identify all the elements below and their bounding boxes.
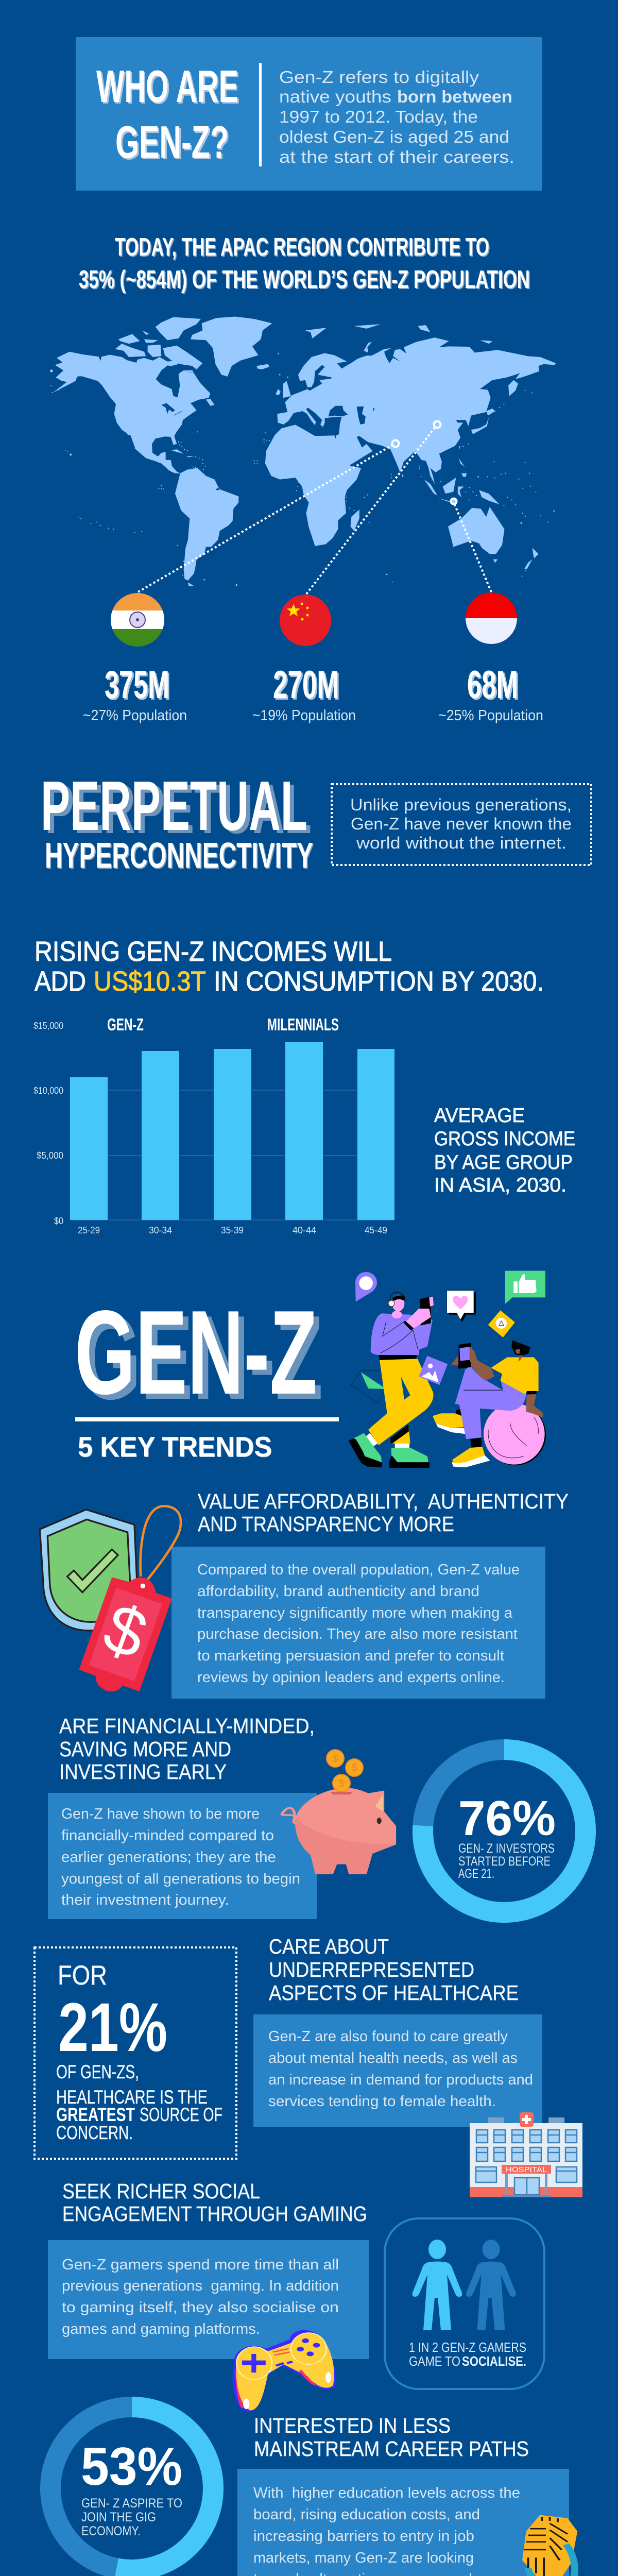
icon: india flag [111,593,164,647]
stat: china 270m: ~19% Population [252,707,356,724]
icon: shield and price tag [40,1506,181,1691]
panel: who are gen-z [76,37,542,191]
bar chart: gross income by age group [33,1015,394,1235]
donut chart: 76%: 76% [458,1791,556,1846]
icon: person dark [466,2240,516,2330]
text: gen-z definition: oldest Gen-Z is aged 25 and [279,127,509,146]
heading: gen-z 5 key trends: 5 KEY TRENDS [78,1431,272,1463]
icon: china flag [280,595,331,646]
heading: rising gen-z incomes: ADD [35,966,86,997]
text: gen-z definition: Gen-Z refers to digitally [279,67,479,87]
heading: who are gen-z [96,61,238,167]
callout: 21% healthcare: CONCERN. [56,2122,133,2143]
stat: indonesia 68m [438,663,543,724]
icon: coins: $ [338,1778,345,1789]
text: gen-z definition [279,67,514,166]
text: healthcare body: Gen-Z are also found to care greatly [268,2028,508,2045]
text: career body: board, rising education costs, and [253,2506,480,2523]
text: gaming body: to gaming itself, they also socialise on [62,2299,339,2316]
heading: rising gen-z incomes: RISING GEN-Z INCOMES WILL [35,936,392,967]
text: gaming body: Gen-Z gamers spend more time than all [62,2257,339,2273]
bar chart: gross income by age group: $0 [54,1216,63,1226]
heading: value affordability: VALUE AFFORDABILITY, AUTHENTICITY [198,1489,569,1513]
heading: gaming: ENGAGEMENT THROUGH GAMING [62,2202,367,2226]
callout: dotted box internet: world without the internet. [356,834,566,852]
heading: rising gen-z incomes: US$10.3T [94,966,206,997]
callout: 21% healthcare: FOR [58,1960,107,1991]
callout: dotted box internet: Gen-Z have never known the [351,815,572,833]
bar chart: gross income by age group: $10,000 [33,1086,63,1096]
heading: financially-minded [59,1714,315,1784]
text: chart caption [434,1105,575,1196]
trend 1: value affordability [40,1489,569,1699]
donut chart: 76%: AGE 21. [458,1867,494,1881]
text: chart caption: IN ASIA, 2030. [434,1174,566,1196]
text: value body: Compared to the overall population, Gen-Z value [197,1562,520,1578]
heading: rising gen-z incomes: IN CONSUMPTION BY 2030. [214,966,544,997]
icon: coins [327,1750,363,1792]
text: healthcare body: an increase in demand for products and [268,2072,533,2088]
heading: perpetual hyperconnectivity: HYPERCONNECTIVITY [45,835,313,875]
heading: gaming: SEEK RICHER SOCIAL [62,2179,260,2203]
icon: hospital [470,2112,582,2197]
heading: career paths: INTERESTED IN LESS [254,2414,451,2437]
bar chart: gross income by age group: 30-34 [149,1225,172,1235]
callout: 21% healthcare: SOURCE OF [140,2104,222,2125]
trend 2: financially-minded [48,1714,586,1919]
icon: indonesia flag [466,592,517,644]
text: career body [253,2485,520,2576]
heading: career paths: MAINSTREAM CAREER PATHS [254,2437,529,2461]
text: financial body: earlier generations; they are the [61,1849,276,1866]
text: gaming body: games and gaming platforms. [62,2321,260,2337]
heading: who are gen-z: GEN-Z? [115,116,229,167]
icon: game controller [233,2330,336,2412]
illustration: gen-z people with phones [349,1271,546,1468]
icon: hospital: HOSPITAL [506,2165,547,2174]
bar chart: gross income by age group: $15,000 [33,1021,63,1031]
text: chart caption: GROSS INCOME [434,1128,575,1150]
text: financial body: youngest of all generations to begin [61,1871,300,1887]
callout: 21% healthcare: 21% [58,1989,167,2066]
stat: india 375m: 375M [105,663,169,707]
callout: 1 in 2 gamers: GAME TO [409,2353,460,2369]
stat: indonesia 68m: ~25% Population [438,707,543,724]
stat: indonesia 68m: 68M [467,663,518,707]
connector lines: flags to map markers [138,421,491,594]
heading: financially-minded: SAVING MORE AND [59,1737,231,1761]
callout: 1 in 2 gamers [385,2218,544,2389]
heading: rising gen-z incomes [35,936,544,997]
text: career body: increasing barriers to entry in job [253,2528,474,2545]
heading: apac population [79,233,530,294]
callout: 21% healthcare: OF GEN-ZS, [56,2061,139,2082]
bar chart: gross income by age group: 45-49 [365,1225,387,1235]
text: gen-z definition: at the start of their careers. [279,147,514,166]
trend 5: career paths [237,2414,580,2576]
text: gen-z definition: born between [397,87,512,106]
heading: gen-z 5 key trends: GEN-Z [75,1286,317,1419]
icon: coins: $ [351,1762,357,1774]
text: chart caption: BY AGE GROUP [434,1151,573,1174]
stat: china 270m: 270M [273,663,339,707]
donut chart: 76% [423,1750,586,1912]
trend 4: gaming [48,2179,544,2412]
text: gaming body [62,2257,339,2337]
text: gaming body: previous generations gaming. In addition [62,2278,339,2294]
heading: financially-minded: INVESTING EARLY [59,1760,227,1784]
text: financial body: financially-minded compared to [61,1827,274,1844]
icon: person light [413,2240,462,2330]
heading: perpetual hyperconnectivity: PERPETUAL [41,767,307,845]
bar chart: gross income by age group: MILENNIALS [267,1015,339,1034]
heading: healthcare: CARE ABOUT [269,1935,389,1958]
text: financial body: their investment journey. [61,1892,229,1908]
callout: dotted box internet [332,784,591,865]
donut chart: 53%: ECONOMY. [81,2524,141,2538]
text: gen-z definition: 1997 to 2012. Today, the [279,107,478,126]
bar chart: gross income by age group: GEN-Z [107,1015,144,1034]
text: value body [197,1562,520,1686]
text: value body: affordability, brand authenticity and brand [197,1583,479,1600]
heading: gen-z 5 key trends [75,1286,339,1463]
text: value body: transparency significantly more when making a [197,1605,513,1621]
heading: career paths [254,2414,529,2461]
callout: 21% healthcare: HEALTHCARE IS THE [56,2087,208,2108]
text: chart caption: AVERAGE [434,1105,525,1127]
heading: healthcare: UNDERREPRESENTED [269,1958,474,1981]
stat: china 270m [252,663,356,724]
callout: 21% healthcare [35,1947,236,2159]
world map [50,316,556,586]
text: financial body [61,1806,300,1908]
stat: india 375m [83,663,187,724]
donut chart: 53%: GEN- Z ASPIRE TO [81,2496,182,2511]
icon: shield and price tag: $ [94,1588,157,1674]
heading: who are gen-z: WHO ARE [96,61,238,112]
text: healthcare body [268,2028,533,2110]
text: financial body: Gen-Z have shown to be more [61,1806,260,1822]
heading: perpetual hyperconnectivity [41,767,313,875]
text: healthcare body: services tending to female health. [268,2093,496,2110]
donut chart: 76%: STARTED BEFORE [458,1854,551,1869]
icon: coins: $ [332,1753,338,1765]
text: value body: to marketing persuasion and prefer to consult [197,1648,504,1664]
icon: piggy bank [282,1750,396,1874]
heading: healthcare: ASPECTS OF HEALTHCARE [269,1981,519,2005]
heading: financially-minded: ARE FINANCIALLY-MINDED, [59,1714,315,1738]
text: gen-z definition: native youths [279,87,391,106]
text: value body: purchase decision. They are also more resistant [197,1626,518,1642]
heading: value affordability: AND TRANSPARENCY MORE [198,1512,454,1536]
callout: 1 in 2 gamers: 1 IN 2 GEN-Z GAMERS [409,2340,526,2355]
text: career body: markets, many Gen-Z are looking [253,2550,474,2566]
bar chart: gross income by age group: 40-44 [293,1225,316,1235]
callout: dotted box internet: Unlike previous generations, [350,795,572,814]
callout: 1 in 2 gamers: SOCIALISE. [462,2353,526,2369]
text: career body: With higher education levels across the [253,2485,520,2501]
icon: microphone [522,2515,580,2576]
donut chart: 53%: 53% [81,2437,182,2497]
donut chart: 76%: GEN- Z INVESTORS [458,1841,555,1856]
text: healthcare body: about mental health needs, as well as [268,2050,518,2066]
callout: 21% healthcare: GREATEST [56,2104,135,2125]
stat: india 375m: ~27% Population [83,707,187,724]
bar chart: gross income by age group: 35-39 [221,1225,244,1235]
heading: gaming [62,2179,367,2226]
donut chart: 53%: JOIN THE GIG [81,2510,156,2524]
heading: value affordability [198,1489,569,1536]
heading: healthcare [269,1935,519,2005]
bar chart: gross income by age group: 25-29 [78,1225,100,1235]
trend 3: healthcare [253,1935,582,2197]
donut chart: 53% [50,2407,213,2570]
text: value body: reviews by opinion leaders and experts online. [197,1669,505,1686]
bar chart: gross income by age group: $5,000 [37,1150,63,1161]
